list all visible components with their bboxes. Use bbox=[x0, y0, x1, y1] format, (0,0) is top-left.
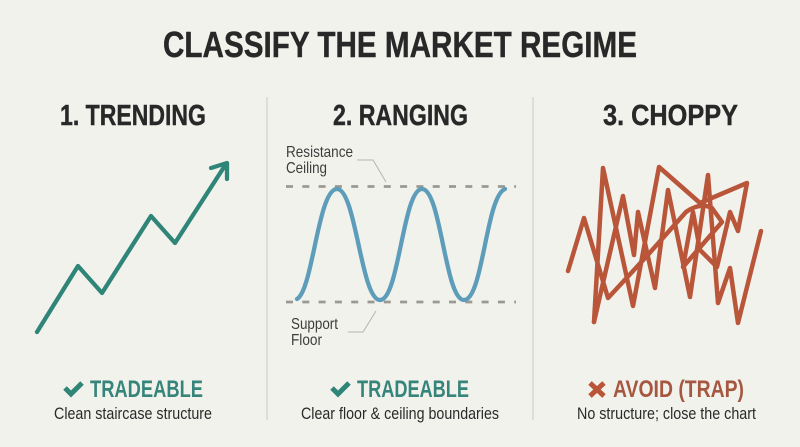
status: avoid: AVOID (TRAP) bbox=[613, 376, 744, 403]
chart: rising staircase arrow bbox=[37, 163, 227, 332]
heading: trending: 1. TRENDING bbox=[60, 100, 206, 132]
icon: check mark bbox=[332, 383, 349, 394]
caption: trending: Clean staircase structure bbox=[54, 405, 212, 423]
panel: ranging bbox=[286, 100, 516, 423]
panel: choppy bbox=[568, 100, 761, 423]
panel: trending bbox=[37, 100, 227, 423]
status: tradeable bbox=[332, 376, 469, 403]
icon: cross mark bbox=[590, 383, 604, 396]
chart: oscillation between support and resistance bbox=[286, 186, 516, 302]
heading: choppy: 3. CHOPPY bbox=[603, 100, 738, 132]
caption: choppy: No structure; close the chart bbox=[577, 405, 756, 423]
status: tradeable bbox=[65, 376, 203, 403]
caption: ranging: Clear floor & ceiling boundaries bbox=[301, 405, 499, 423]
label: support floor bbox=[291, 311, 376, 349]
chart: tangled chop line bbox=[568, 167, 761, 323]
label: resistance ceiling bbox=[286, 144, 386, 182]
label: resistance ceiling: Resistance bbox=[286, 144, 353, 161]
label: resistance ceiling: Ceiling bbox=[286, 160, 327, 177]
heading: ranging: 2. RANGING bbox=[333, 100, 468, 132]
label: support floor: Support bbox=[291, 316, 338, 333]
label: support floor: Floor bbox=[291, 332, 323, 349]
status: tradeable: TRADEABLE bbox=[357, 376, 469, 403]
icon: check mark bbox=[65, 383, 82, 394]
title: CLASSIFY THE MARKET REGIME bbox=[163, 24, 637, 65]
status: tradeable: TRADEABLE bbox=[90, 376, 203, 403]
